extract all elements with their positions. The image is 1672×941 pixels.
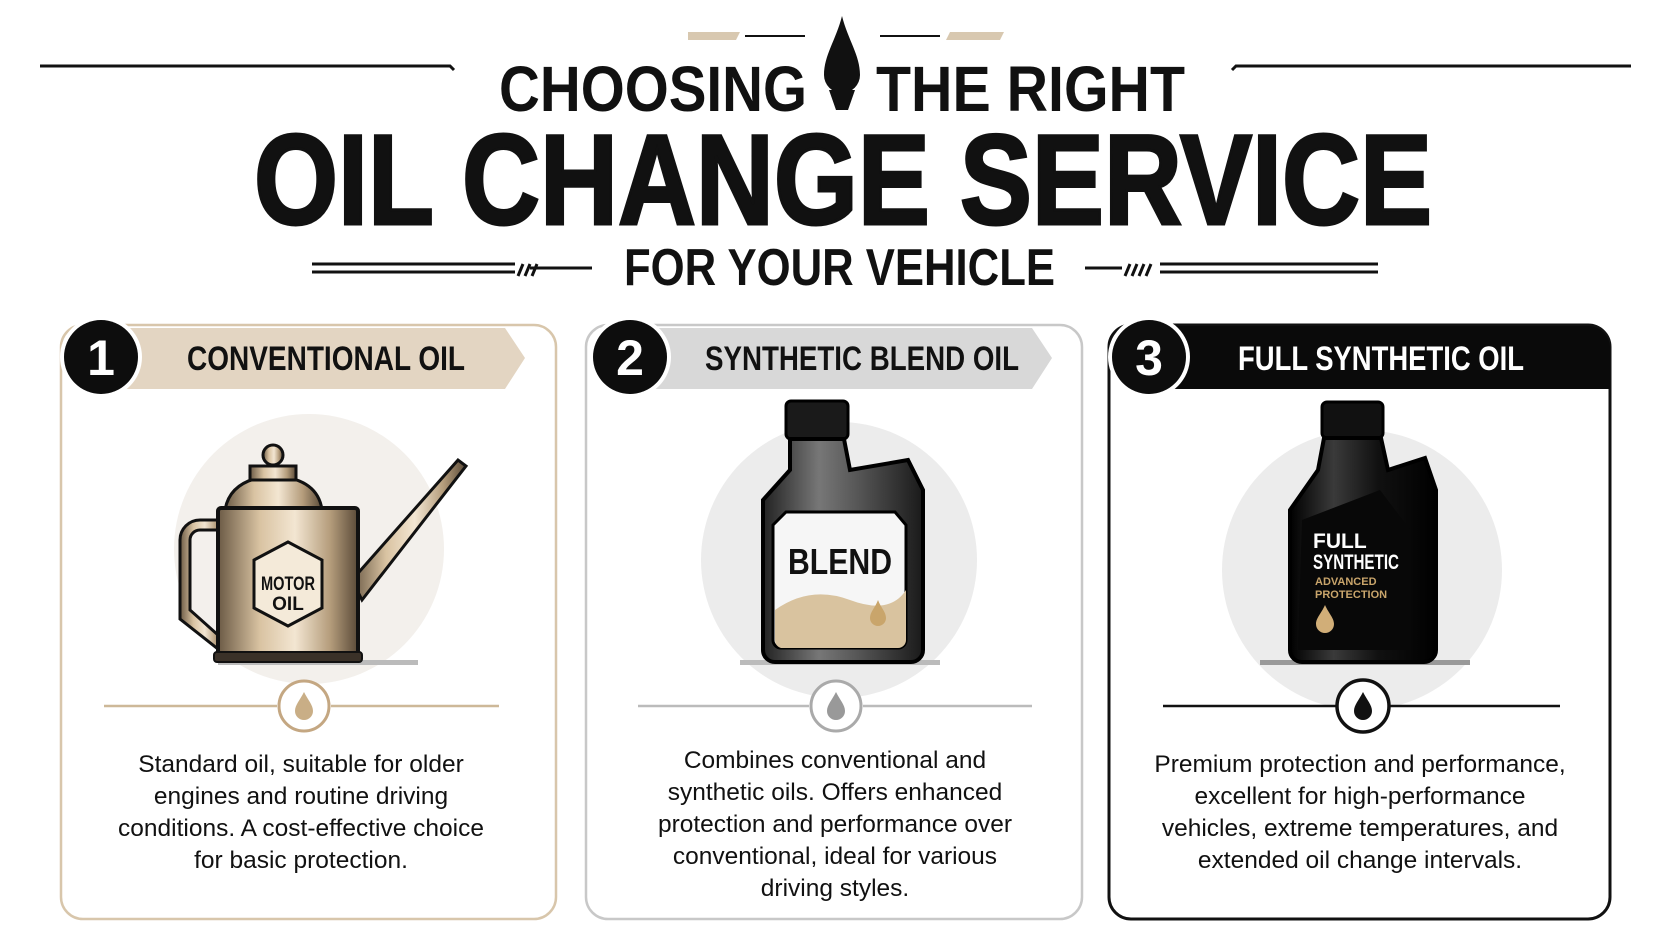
text: full synthetic description: vehicles, extreme temperatures, and [1162, 815, 1558, 842]
panel: full synthetic oil [1108, 316, 1610, 919]
title line 1: CHOOSING [499, 53, 807, 125]
header banner: conventional: 1 [87, 330, 115, 386]
text: full synthetic description [1154, 751, 1566, 874]
header banner: full synthetic: FULL SYNTHETIC OIL [1238, 340, 1524, 378]
header decoration lines [40, 32, 1631, 70]
panel: conventional oil [60, 316, 556, 919]
illustration: oil can [174, 414, 466, 684]
divider with drop icon: full synthetic [1163, 680, 1560, 732]
illustration: blend bottle: BLEND [788, 541, 892, 582]
divider with drop icon: blend [638, 681, 1032, 731]
text: full synthetic description: excellent for high-performance [1195, 783, 1525, 810]
title line 2: OIL CHANGE SERVICE [254, 109, 1432, 252]
subtitle [312, 239, 1378, 297]
divider with drop icon: conventional [104, 681, 499, 731]
text: blend description: conventional, ideal for various [673, 843, 997, 870]
illustration: oil can: OIL [272, 594, 304, 615]
text: conventional description: Standard oil, suitable for older [138, 751, 464, 778]
title line 1 [499, 53, 1185, 125]
text: blend description: synthetic oils. Offers enhanced [668, 779, 1002, 806]
illustration: blend bottle [701, 401, 977, 698]
header banner: synthetic blend: SYNTHETIC BLEND OIL [705, 340, 1019, 378]
illustration: full synthetic bottle: FULL [1313, 530, 1367, 553]
header banner: full synthetic [1108, 316, 1610, 398]
text: full synthetic description: Premium protection and performance, [1154, 751, 1566, 778]
text: blend description: Combines conventional and [684, 747, 986, 774]
header banner: conventional: CONVENTIONAL OIL [187, 340, 465, 378]
header banner: synthetic blend: 2 [616, 330, 644, 386]
text: full synthetic description: extended oil change intervals. [1198, 847, 1522, 874]
header banner: full synthetic: 3 [1135, 330, 1163, 386]
illustration: full synthetic bottle: PROTECTION [1315, 589, 1387, 601]
subtitle: FOR YOUR VEHICLE [624, 239, 1055, 297]
text: blend description: driving styles. [761, 875, 909, 902]
text: conventional description: conditions. A cost-effective choice [118, 815, 484, 842]
illustration: oil can: MOTOR [261, 574, 315, 595]
text: conventional description [118, 751, 484, 874]
header banner: synthetic blend [589, 316, 1052, 398]
panel: synthetic blend oil [586, 316, 1082, 919]
header banner: conventional [60, 316, 525, 398]
text: blend description: protection and performance over [658, 811, 1012, 838]
illustration: full synthetic bottle: ADVANCED [1315, 576, 1377, 588]
icon: oil drop in title [824, 16, 860, 110]
text: conventional description: for basic protection. [194, 847, 408, 874]
text: blend description [658, 747, 1012, 902]
illustration: full synthetic bottle: SYNTHETIC [1313, 551, 1399, 574]
text: conventional description: engines and routine driving [154, 783, 448, 810]
illustration: full synthetic bottle [1222, 402, 1502, 710]
title line 1: THE RIGHT [876, 53, 1185, 125]
